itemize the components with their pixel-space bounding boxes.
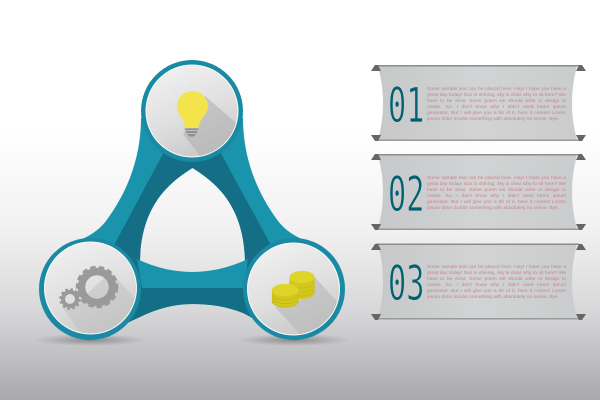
text block 2: Some sample text can be placed here. Hey! I hope you have a — [427, 176, 566, 180]
icon: gears — [60, 268, 116, 308]
text block 1: generator. But I will give you a bit of it, here it comes! Lorem — [427, 111, 566, 116]
number 02: 02 — [388, 168, 424, 223]
ground shadow: left circle — [34, 334, 146, 346]
top disc with light bulb icon — [146, 64, 238, 158]
text block 3: have to be clear. Some poem we should write or design to — [427, 277, 566, 282]
banner 2 — [371, 154, 586, 230]
text block 2: create. So, I don't know why I didn't used lorem ipsum — [427, 194, 566, 199]
icon: light bulb — [167, 84, 210, 136]
banner 3 — [371, 244, 586, 320]
banner 1 — [371, 65, 586, 141]
left disc with gears icon — [44, 242, 137, 334]
text block 2: ipsum dolor incidor something with absolutely no sense. Bye. — [427, 206, 559, 211]
text block 2: great day today! Sun is shining, sky is clear why to sit here? We — [427, 182, 566, 187]
number 01: 01 — [388, 79, 424, 134]
triangular teal connector — [39, 60, 345, 345]
text block 1 — [427, 86, 566, 122]
text block 1: ipsum dolor incidor something with absolutely no sense. Bye. — [427, 117, 559, 122]
right disc with coins icon — [247, 242, 340, 336]
text block 1: Some sample text can be placed here. Hey! I hope you have a — [427, 86, 566, 92]
text block 1: great day today! Sun is shining, sky is clear why to sit here? We — [427, 93, 566, 98]
text block 1: create. So, I don't know why I didn't used lorem ipsum — [427, 105, 566, 110]
text block 3: Some sample text can be placed here. Hey! I hope you have a — [427, 264, 566, 270]
text block 3: generator. But I will give you a bit of it, here it comes! Lorem — [427, 289, 566, 294]
text block 3 — [427, 264, 566, 300]
icon: coin stacks — [272, 271, 314, 307]
text block 1: have to be clear. Some poem we should write or design to — [427, 99, 566, 104]
text block 3: create. So, I don't know why I didn't used lorem ipsum — [427, 283, 566, 288]
ground shadow: right circle — [238, 334, 350, 346]
number 03: 03 — [388, 257, 424, 312]
text block 2: have to be clear. Some poem we should write or design to — [427, 188, 566, 193]
text block 3: ipsum dolor incidor something with absolutely no sense. Bye. — [427, 295, 559, 300]
text block 2: generator. But I will give you a bit of it, here it comes! Lorem — [427, 200, 566, 205]
text block 2 — [427, 176, 566, 211]
text block 3: great day today! Sun is shining, sky is clear why to sit here? We — [427, 271, 566, 276]
